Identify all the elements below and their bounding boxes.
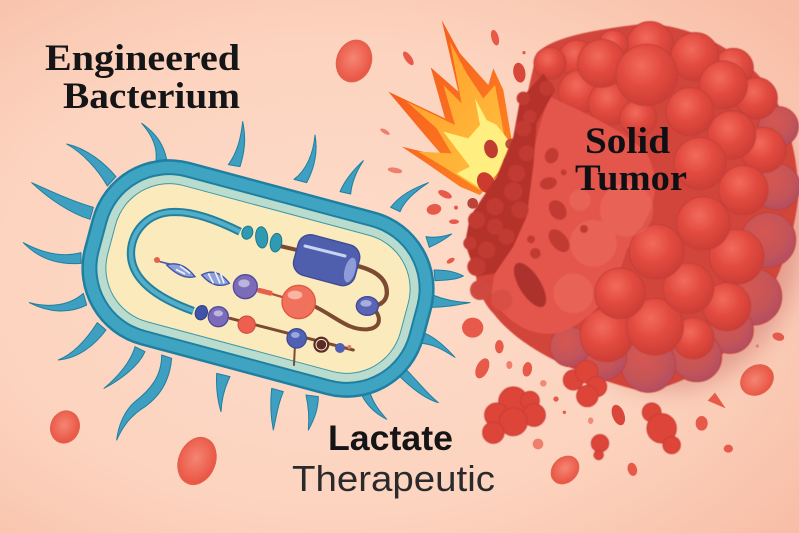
label: Lactate Therapeutic [292,419,495,499]
label: Solid Tumor: Solid [585,121,670,162]
label: Lactate Therapeutic: Lactate [328,419,453,458]
terminal beads [335,343,345,353]
red lobes [534,22,786,362]
promoter ring [313,337,329,353]
label: Solid Tumor: Tumor [575,158,687,199]
lower beads [193,304,209,322]
blood cells and debris [46,29,785,490]
title: Engineered Bacterium [45,38,240,117]
tumor body [463,22,799,460]
smooth left face [492,97,655,334]
cell wall [63,141,453,416]
bacterium [23,122,470,440]
red connector [257,288,273,296]
large red bead [282,285,315,319]
tube [131,212,240,311]
upper purple bead [233,275,257,299]
bottom fragment clusters [483,360,680,460]
crater crumbs [463,73,588,312]
flagella [23,122,470,440]
title: Engineered Bacterium: Engineered [45,38,240,79]
DNA helices [167,264,229,285]
flame burst [388,20,516,196]
internal genetic circuit [131,212,387,365]
crater pits [508,146,588,312]
label: Solid Tumor [575,121,687,199]
teal beads [240,225,283,253]
blue cylinder [291,232,363,288]
title: Engineered Bacterium: Bacterium [63,76,240,117]
soft inner lobes [553,183,653,313]
tumor base silhouette [475,23,798,392]
tumor shadow [533,60,799,390]
brown wires [160,246,387,365]
red tip [154,257,160,263]
label: Lactate Therapeutic: Therapeutic [292,458,495,499]
solid tumor [463,22,799,460]
shadowed back lobes [550,107,799,392]
right blue bead [356,297,378,315]
